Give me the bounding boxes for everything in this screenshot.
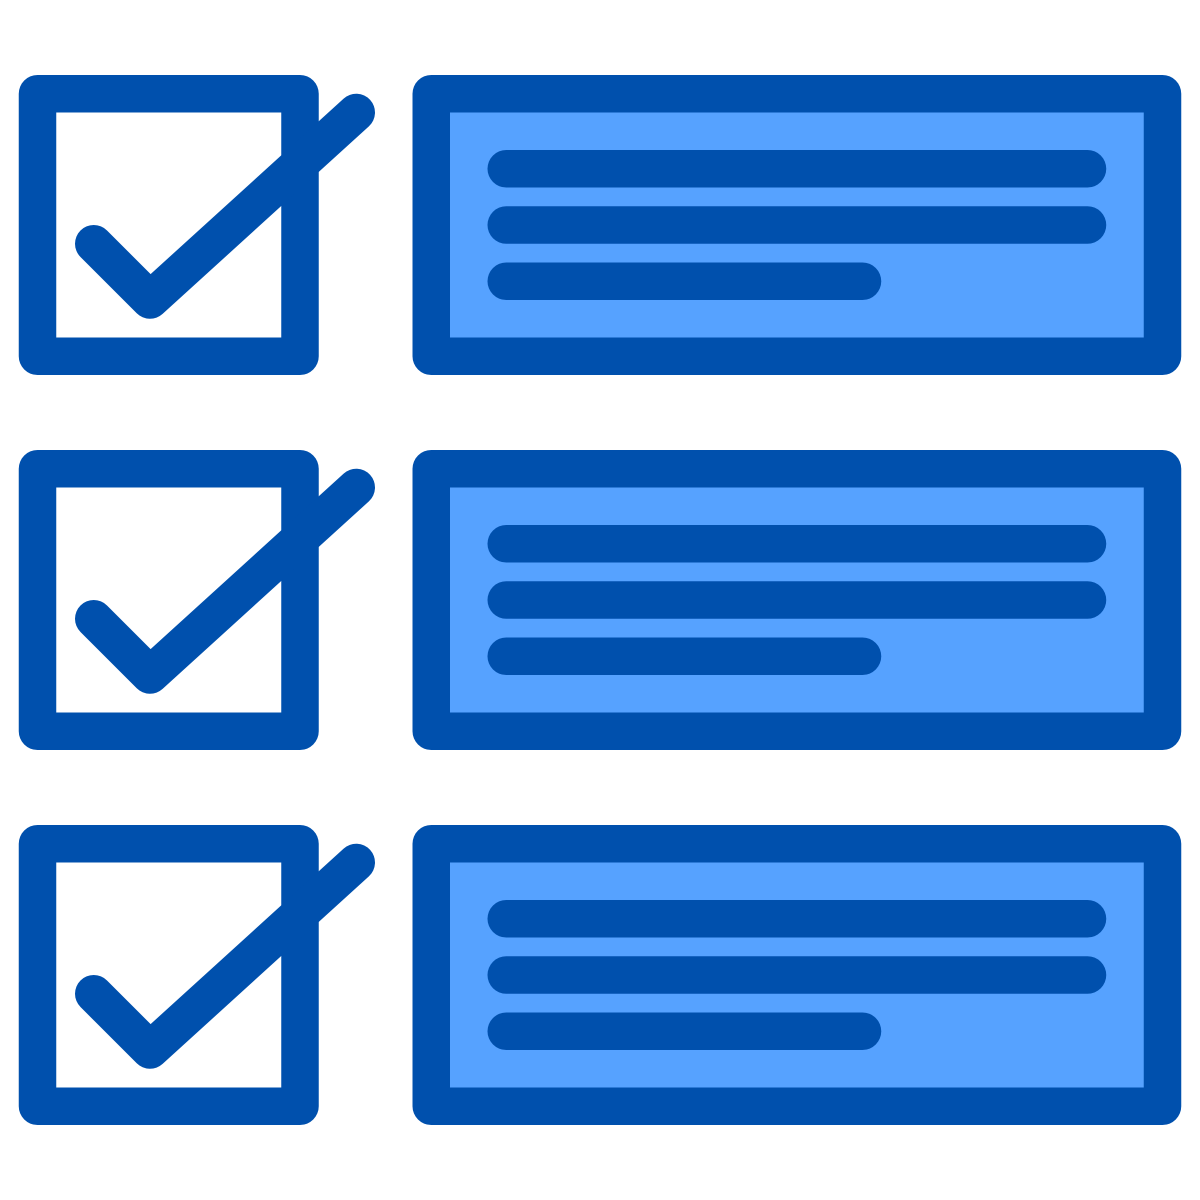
panel background 1 <box>431 94 1162 356</box>
checkbox 1 <box>38 94 300 356</box>
panel background 2 <box>431 469 1162 731</box>
row 1 <box>38 94 1162 356</box>
checkbox 2 <box>38 469 300 731</box>
text panel 3 <box>431 844 1162 1106</box>
text lines 2 <box>506 544 1088 656</box>
row 2 <box>38 469 1162 731</box>
text panel 1 <box>431 94 1162 356</box>
text lines 3 <box>506 919 1088 1031</box>
text lines 1 <box>506 169 1088 281</box>
row 3 <box>38 844 1162 1106</box>
text panel 2 <box>431 469 1162 731</box>
panel background 3 <box>431 844 1162 1106</box>
check mark 3 <box>94 862 356 1050</box>
check mark 2 <box>94 488 356 675</box>
checkbox 3 <box>38 844 300 1106</box>
check mark 1 <box>94 112 356 300</box>
